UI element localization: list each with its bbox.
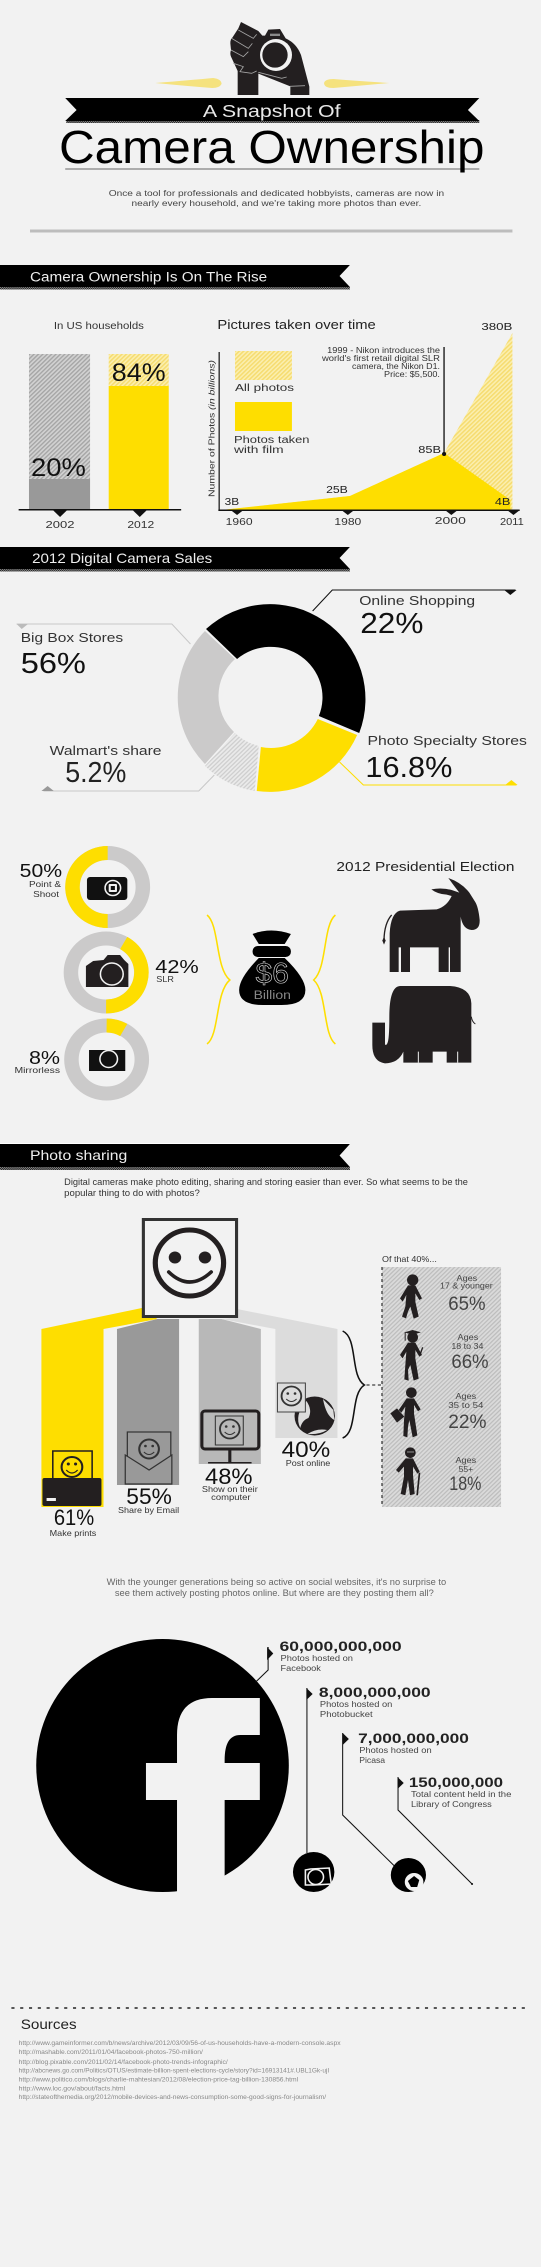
photo sharing intro text: Digital cameras make photo editing, sharing and storing easier than ever. So what seems to be the <box>64 1177 468 1187</box>
callout: big box stores: 56% <box>21 647 86 680</box>
stat: library of congress: Library of Congress <box>411 1799 492 1809</box>
data labels: 1980 <box>334 516 361 528</box>
column: post online <box>222 1309 337 1468</box>
sources: Sources <box>21 2017 77 2033</box>
section banner: 2012 Digital Camera Sales <box>0 547 350 572</box>
icon: globe with photo <box>277 1383 335 1436</box>
icon: facebook logo circle <box>36 1639 289 1893</box>
chart heading: In US households <box>54 320 144 332</box>
callout: big box stores: Big Box Stores <box>21 630 124 645</box>
legend: photos taken with film: with film <box>233 444 284 456</box>
intro text: Once a tool for professionals and dedicated hobbyists, cameras are now in <box>109 188 444 198</box>
callout: photo specialty stores: 16.8% <box>365 751 452 784</box>
axis: 2012 <box>127 519 154 531</box>
callout: walmart's share: 5.2% <box>65 756 126 789</box>
y axis label: Number of Photos (in billions) <box>207 360 216 497</box>
bar 2012: 84% <box>112 359 166 387</box>
icon: money bag $6 Billion: Billion <box>254 988 291 1002</box>
callout: Nikon D1 1999: Price: $5,500. <box>384 370 440 379</box>
age group: 55 plus <box>396 1447 481 1495</box>
section banner: 2012 Digital Camera Sales: 2012 Digital Camera Sales <box>32 551 212 567</box>
bar 2012 <box>109 354 169 509</box>
stat: facebook photos: Photos hosted on <box>281 1653 353 1663</box>
column: make prints: 61% <box>54 1505 94 1530</box>
stat: picasa photos: Picasa <box>359 1755 385 1765</box>
stat: facebook photos: Facebook <box>281 1663 322 1673</box>
callout: photo specialty stores: Photo Specialty Stores <box>367 733 527 748</box>
data labels: 4B <box>495 497 511 508</box>
header icon: hand holding camera <box>230 22 309 95</box>
legend: all photos: All photos <box>235 382 294 394</box>
chart heading: Pictures taken over time <box>217 317 376 332</box>
icon: democrat donkey <box>382 878 480 972</box>
title banner <box>65 98 479 123</box>
callout: online shopping: 22% <box>360 607 423 640</box>
column: share by email: 55% <box>126 1484 172 1509</box>
donut chart: camera sales <box>178 604 365 792</box>
callout: Nikon D1 1999: 1999 - Nikon introduces the <box>327 346 440 355</box>
sources: http://www.politico.com/blogs/charlie-mahtesian/2012/08/election-price-tag-billion-130856.html <box>19 2077 298 2083</box>
icon: email envelope with photo <box>125 1432 172 1484</box>
age group: 18 to 34: 66% <box>451 1352 489 1373</box>
age group: 18 to 34: 18 to 34 <box>451 1342 484 1351</box>
icon: graduate <box>400 1330 423 1381</box>
data labels: 25B <box>326 485 348 496</box>
age group: 18 to 34 <box>400 1330 489 1381</box>
age group: 18 to 34: Ages <box>458 1333 478 1342</box>
panel: post online by age: Of that 40%... <box>382 1255 437 1264</box>
age group: 55 plus: 55+ <box>459 1465 473 1474</box>
age group: 17 and younger: 65% <box>448 1294 486 1315</box>
ring: SLR: SLR <box>156 975 174 984</box>
icon: mirrorless camera <box>89 1050 125 1071</box>
column: make prints: Make prints <box>50 1529 96 1538</box>
data labels: 3B <box>225 497 239 508</box>
sources: http://abcnews.go.com/Politics/OTUS/estimate-billion-spent-elections-cycle/story?id=16913141#.UBL1Gk-ujI <box>19 2068 330 2074</box>
callout: photo specialty stores <box>340 733 527 785</box>
axis: 2002 <box>46 519 75 531</box>
stat: facebook photos <box>256 1639 402 1682</box>
segment: online shopping <box>206 604 365 733</box>
area: photos taken with film <box>222 453 510 510</box>
bar chart: US households <box>19 320 181 531</box>
stat: library of congress: Total content held in the <box>411 1789 512 1799</box>
title: Camera Ownership: Camera Ownership <box>59 122 484 173</box>
column: share by email <box>117 1319 179 1515</box>
ring: point and shoot: Point & <box>29 880 62 889</box>
age group: 17 and younger <box>400 1274 493 1319</box>
callout: big box stores <box>17 624 190 680</box>
ring: point and shoot: 50% <box>20 860 62 881</box>
sources: http://blog.pixable.com/2011/02/14/facebook-photo-trends-infographic/ <box>19 2059 228 2066</box>
section banner: Camera Ownership Is On The Rise <box>0 265 350 290</box>
legend: photos taken with film: Photos taken <box>234 434 310 446</box>
icon: smiley photo frame <box>143 1220 237 1316</box>
icon: republican elephant <box>372 986 475 1063</box>
legend: all photos <box>235 351 294 394</box>
ring: mirrorless: Mirrorless <box>14 1066 60 1075</box>
icon: computer monitor with photo <box>202 1411 259 1464</box>
photo sharing intro text <box>64 1177 468 1198</box>
age group: 17 and younger: 17 & younger <box>440 1282 493 1290</box>
data labels: 2011 <box>500 516 524 528</box>
section banner: Camera Ownership Is On The Rise: Camera Ownership Is On The Rise <box>30 270 267 284</box>
age group: 55 plus: 18% <box>449 1474 481 1495</box>
icon: photobucket <box>293 1852 334 1892</box>
age group: 55 plus: Ages <box>455 1456 476 1465</box>
age group: 35 to 54: Ages <box>455 1392 476 1401</box>
right flash accent <box>324 79 389 88</box>
social websites intro text <box>107 1577 446 1598</box>
stat: picasa photos: Photos hosted on <box>359 1745 432 1755</box>
data labels: 2000 <box>435 515 466 527</box>
icon: money bag $6 Billion: $6 <box>256 957 289 990</box>
right yellow brace <box>314 915 335 1044</box>
column: make prints <box>41 1308 157 1538</box>
column: share by email: Share by Email <box>118 1506 179 1515</box>
callout: walmart's share <box>41 743 214 791</box>
stat: photobucket photos <box>293 1685 431 1892</box>
title banner: A Snapshot Of <box>203 100 342 121</box>
icon: printer with photo <box>42 1451 101 1506</box>
left flash accent <box>155 78 222 88</box>
social websites intro text: With the younger generations being so active on social websites, it's no surprise to <box>107 1577 446 1587</box>
age group: 35 to 54: 35 to 54 <box>448 1401 484 1410</box>
age group: 35 to 54 <box>390 1387 487 1437</box>
black brace to age panel <box>343 1331 382 1438</box>
age group: 17 and younger: Ages <box>457 1274 477 1283</box>
social websites intro text: see them actively posting photos online. But where are they posting them all? <box>115 1588 434 1598</box>
ring: mirrorless <box>14 1026 142 1094</box>
sources <box>19 2017 341 2101</box>
icon: SLR camera <box>86 955 128 987</box>
legend: photos taken with film <box>233 402 310 456</box>
section banner: Photo sharing <box>0 1143 350 1170</box>
stat: picasa photos <box>343 1731 469 1892</box>
callout: online shopping <box>313 590 517 640</box>
column: show on computer <box>199 1319 261 1502</box>
data labels: 380B <box>481 322 513 333</box>
icon: child with phone <box>400 1274 422 1319</box>
callout: online shopping: Online Shopping <box>359 593 475 608</box>
icon: money bag $6 Billion <box>239 930 305 1005</box>
photo sharing intro text: popular thing to do with photos? <box>64 1188 200 1198</box>
age group: 35 to 54: 22% <box>448 1412 487 1433</box>
column: show on computer: 48% <box>205 1464 253 1489</box>
callout: walmart's share: Walmart's share <box>50 743 161 758</box>
segment: big box stores <box>178 631 235 764</box>
sources: http://www.gameinformer.com/b/news/archive/2012/03/09/56-of-us-households-have-a-modern-console.aspx <box>19 2040 341 2047</box>
axes <box>218 352 520 515</box>
area: all photos <box>222 333 512 510</box>
intro text <box>109 188 444 208</box>
data labels <box>225 322 524 528</box>
ring: point and shoot <box>20 853 143 921</box>
stat: picasa photos: 7,000,000,000 <box>358 1731 469 1747</box>
callout: Nikon D1 1999: world's first retail digital SLR <box>321 354 440 363</box>
data labels: 85B <box>418 445 441 456</box>
data labels: 1960 <box>226 516 253 528</box>
stat: library of congress: 150,000,000 <box>409 1775 503 1791</box>
column: show on computer: computer <box>211 1493 251 1502</box>
icon: senior with cane <box>396 1447 420 1495</box>
bar 2002 <box>29 354 90 509</box>
section banner: Photo sharing: Photo sharing <box>30 1148 127 1164</box>
axis <box>19 509 181 531</box>
sources: http://mashable.com/2011/01/04/facebook-photos-750-million/ <box>19 2049 203 2056</box>
icon: adult with briefcase <box>390 1387 421 1437</box>
column: show on computer: Show on their <box>202 1485 258 1494</box>
sources: http://stateofthemedia.org/2012/mobile-devices-and-news-consumption-some-good-signs-for-journalism/ <box>19 2094 326 2101</box>
ring: point and shoot: Shoot <box>33 890 60 899</box>
stat: photobucket photos: 8,000,000,000 <box>319 1685 431 1701</box>
heading: 2012 presidential election: 2012 Presidential Election <box>336 859 514 874</box>
left yellow brace <box>207 915 230 1044</box>
stat: photobucket photos: Photobucket <box>320 1709 373 1719</box>
stat: library of congress <box>398 1775 512 1885</box>
callout: Nikon D1 1999 <box>321 346 446 456</box>
icon: picasa <box>391 1858 426 1892</box>
ring: SLR: 42% <box>155 956 199 977</box>
stat: facebook photos: 60,000,000,000 <box>280 1639 402 1655</box>
intro text: nearly every household, and we're taking more photos than ever. <box>131 198 421 208</box>
stat: photobucket photos: Photos hosted on <box>320 1699 393 1709</box>
sources: http://www.loc.gov/about/facts.html <box>19 2086 125 2092</box>
bar 2002: 20% <box>31 454 86 482</box>
ring: mirrorless: 8% <box>29 1047 60 1068</box>
panel: post online by age <box>382 1255 501 1507</box>
column: post online: 40% <box>282 1437 330 1462</box>
segment: walmart <box>205 733 259 791</box>
column: post online: Post online <box>286 1459 331 1468</box>
area chart: pictures taken over time <box>207 317 524 528</box>
segment: photo specialty stores <box>257 719 357 792</box>
ring: SLR <box>71 938 199 1007</box>
icon: compact camera <box>87 877 127 900</box>
callout: Nikon D1 1999: camera, the Nikon D1. <box>352 362 440 371</box>
